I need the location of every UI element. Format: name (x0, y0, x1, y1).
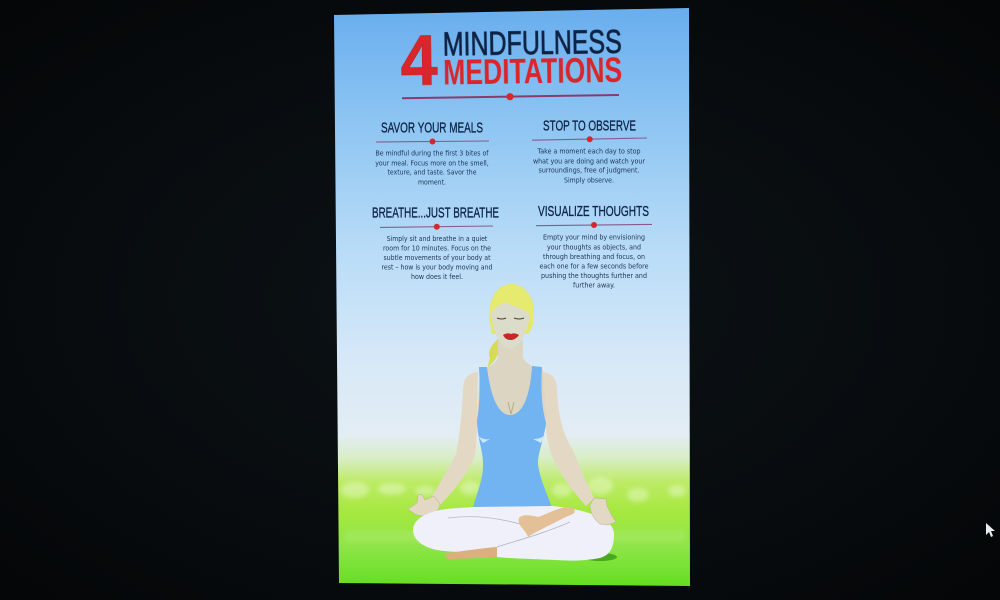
body text: moment. (418, 177, 446, 186)
illustration: meditating woman (408, 284, 617, 561)
cleavage detail (508, 402, 514, 414)
heading: STOP TO OBSERVE (543, 118, 636, 134)
heading: BREATHE...JUST BREATHE (372, 206, 499, 222)
blue tank top (473, 366, 552, 508)
body text: rest – how is your body moving and (382, 262, 492, 271)
panel: stop to observe (532, 118, 647, 185)
body text: through breathing and focus, on (543, 252, 645, 261)
divider (536, 222, 652, 228)
title divider (402, 93, 619, 100)
body text: further away. (573, 281, 615, 290)
title line: mindfulness: MINDFULNESS (442, 23, 622, 62)
body text (533, 147, 645, 185)
body text: each one for a few seconds before (540, 261, 649, 270)
tank highlights (478, 434, 546, 443)
divider (380, 224, 493, 230)
big number 4: 4 (400, 22, 439, 101)
white trousers (413, 506, 614, 561)
body text: subtle movements of your body at (384, 253, 491, 262)
poster background: sky and grass (334, 8, 690, 586)
divider (532, 136, 647, 142)
title (400, 19, 623, 101)
arms (431, 372, 594, 506)
body text: Simply sit and breathe in a quiet (387, 234, 487, 243)
trouser fold lines (448, 517, 570, 547)
body text: your meal. Focus more on the smell, (375, 158, 489, 167)
body text: what you are doing and watch your (533, 156, 645, 165)
neck and chest (477, 340, 546, 420)
right hand (590, 498, 616, 525)
face (491, 294, 530, 349)
body text (382, 234, 492, 281)
lips (503, 333, 519, 340)
hair fringe (489, 285, 534, 326)
divider (376, 138, 489, 144)
closed eyes (497, 318, 524, 319)
mouse cursor (986, 523, 995, 537)
title line: meditations: MEDITATIONS (443, 51, 622, 92)
grass bokeh highlights (341, 477, 686, 542)
body text: texture, and taste. Savor the (388, 168, 477, 177)
body text: pushing the thoughts further and (541, 271, 647, 280)
body text (375, 149, 489, 186)
body text: Empty your mind by envisioning (543, 233, 645, 242)
body text: Simply observe. (564, 176, 614, 185)
body text: how does it feel. (411, 272, 463, 281)
body text: Be mindful during the first 3 bites of (376, 149, 489, 158)
heading: SAVOR YOUR MEALS (381, 120, 483, 136)
left hand (408, 494, 440, 516)
lower foot (445, 547, 497, 559)
upper foot (519, 507, 575, 537)
body text (540, 233, 649, 290)
body text: your thoughts as objects, and (547, 242, 641, 251)
ground shadow (583, 553, 617, 561)
back hair (489, 284, 534, 334)
body text: surroundings, free of judgment. (538, 166, 640, 175)
body text: Take a moment each day to stop (537, 147, 641, 156)
panel: breathe just breathe (372, 206, 499, 281)
body text: room for 10 minutes. Focus on the (383, 244, 492, 253)
heading: VISUALIZE THOUGHTS (538, 204, 649, 220)
ponytail (488, 338, 499, 367)
panel: savor your meals (375, 120, 489, 186)
panel: visualize thoughts (536, 204, 652, 290)
